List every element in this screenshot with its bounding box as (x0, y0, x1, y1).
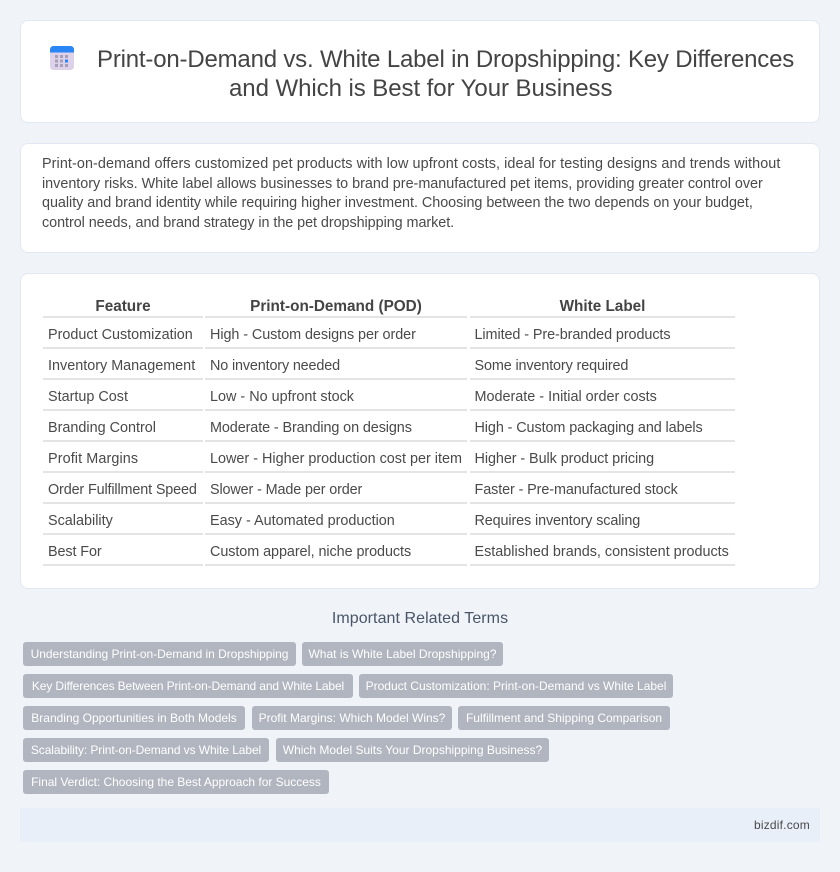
tags: related terms: Final Verdict: Choosing the Best Approach for Success (31, 775, 321, 789)
tags: related terms (23, 642, 673, 794)
row: best for: Custom apparel, niche products (210, 544, 411, 560)
tags: related terms: Which Model Suits Your Dropshipping Business? (283, 743, 542, 757)
title: Print-on-Demand vs. White Label in Dropshipping: Key Differences (97, 46, 794, 73)
row: order fulfillment speed: Slower - Made per order (210, 482, 362, 498)
row: product customization: Limited - Pre-branded products (474, 327, 670, 343)
row: scalability: Easy - Automated production (210, 513, 395, 529)
row: best for: Best For (48, 544, 102, 560)
footer (20, 808, 820, 842)
panel: summary (20, 143, 820, 253)
row: branding control (48, 420, 703, 436)
tags: related terms: Understanding Print-on-Demand in Dropshipping (31, 647, 288, 661)
heading: related terms: Important Related Terms (332, 610, 508, 627)
summary text: Print-on-demand offers customized pet products with low upfront costs, ideal for testing designs and trends without (42, 156, 780, 172)
row: best for: Established brands, consistent products (474, 544, 729, 560)
row: inventory management: No inventory needed (210, 358, 340, 374)
row: profit margins: Profit Margins (48, 451, 138, 467)
row: branding control: Moderate - Branding on designs (210, 420, 412, 436)
title: and Which is Best for Your Business (229, 75, 612, 102)
summary text: inventory risks. White label allows businesses to brand pre-manufactured pet items, providing greater control over (42, 176, 763, 192)
table header: Feature (95, 298, 151, 315)
row: startup cost (48, 389, 657, 405)
tags: related terms: What is White Label Dropshipping? (308, 647, 497, 661)
row: scalability (48, 513, 640, 529)
row: startup cost: Moderate - Initial order costs (474, 389, 657, 405)
table header: Print-on-Demand (POD) (250, 298, 422, 315)
row: product customization: High - Custom designs per order (210, 327, 416, 343)
row: best for (48, 544, 729, 560)
summary text (42, 156, 780, 231)
tags: related terms: Fulfillment and Shipping Comparison (466, 711, 662, 725)
row: inventory management: Some inventory required (474, 358, 628, 374)
table header (95, 298, 645, 315)
row: order fulfillment speed (48, 482, 678, 498)
row: product customization: Product Customization (48, 327, 193, 343)
row: profit margins (48, 451, 654, 467)
panel: comparison table (20, 273, 820, 589)
tags: related terms: Profit Margins: Which Model Wins? (259, 711, 445, 725)
row: scalability: Requires inventory scaling (474, 513, 640, 529)
row: product customization (48, 327, 670, 343)
row: branding control: Branding Control (48, 420, 156, 436)
row: inventory management: Inventory Management (48, 358, 195, 374)
row: inventory management (48, 358, 628, 374)
summary text: quality and brand identity while requiring higher investment. Choosing between the two depends on your budget, (42, 195, 753, 211)
tags: related terms: Key Differences Between Print-on-Demand and White Label (32, 679, 344, 693)
summary text: control needs, and brand strategy in the pet dropshipping market. (42, 215, 454, 231)
row: profit margins: Lower - Higher production cost per item (210, 451, 462, 467)
panel: title card (20, 20, 820, 123)
row: order fulfillment speed: Faster - Pre-manufactured stock (474, 482, 678, 498)
row: profit margins: Higher - Bulk product pricing (474, 451, 654, 467)
icon: calendar (50, 46, 74, 70)
row: order fulfillment speed: Order Fulfillment Speed (48, 482, 197, 498)
tags: related terms: Branding Opportunities in Both Models (31, 711, 237, 725)
row: branding control: High - Custom packaging and labels (474, 420, 703, 436)
row: startup cost: Startup Cost (48, 389, 128, 405)
tags: related terms: Product Customization: Print-on-Demand vs White Label (366, 679, 666, 693)
table header: White Label (560, 298, 645, 315)
title (97, 46, 794, 102)
footer source: bizdif.com (754, 818, 810, 832)
row: startup cost: Low - No upfront stock (210, 389, 354, 405)
tags: related terms: Scalability: Print-on-Demand vs White Label (31, 743, 261, 757)
row: scalability: Scalability (48, 513, 113, 529)
